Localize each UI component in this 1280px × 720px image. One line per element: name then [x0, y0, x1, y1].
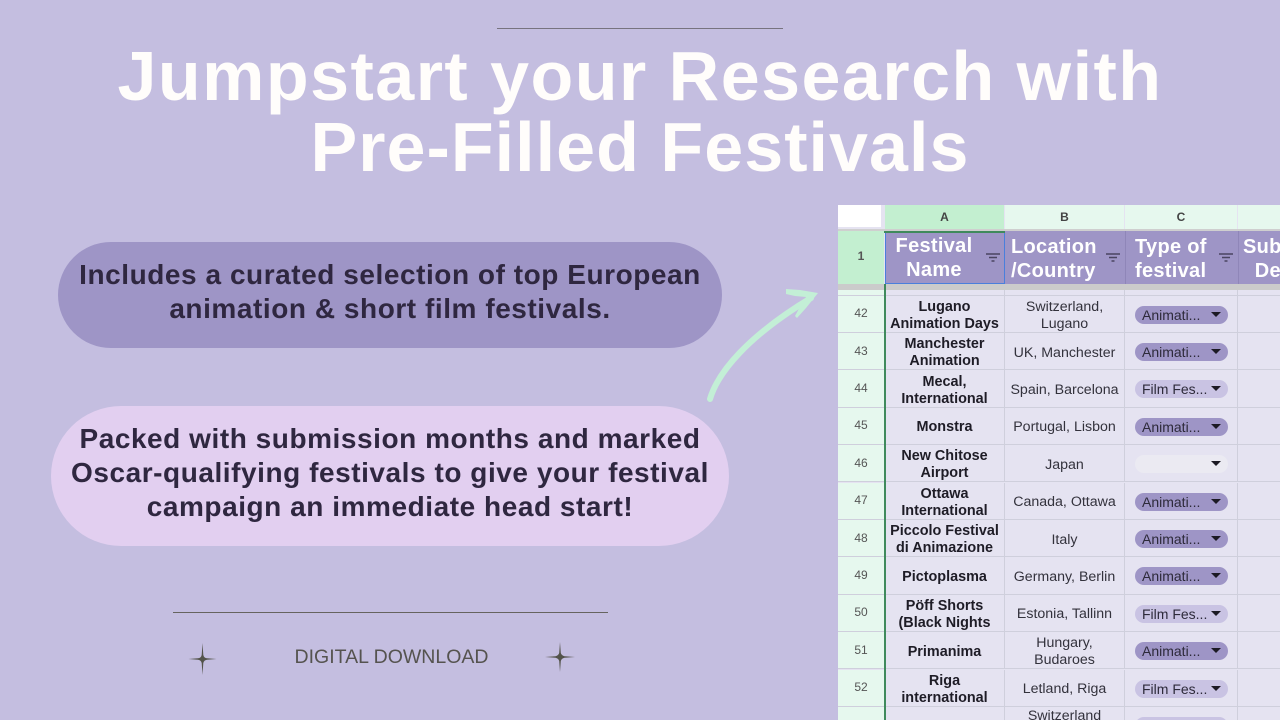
row header 1: [838, 231, 884, 284]
row 43: Manchester: [904, 336, 984, 352]
header cell: type: [1125, 231, 1238, 284]
icon: filter B: [1106, 253, 1120, 262]
row 51: Hungary,: [1036, 635, 1093, 651]
row 51: Animati...: [1142, 643, 1200, 659]
row 49: [838, 557, 1280, 595]
column header B: B: [1060, 210, 1069, 224]
digital download label: DIGITAL DOWNLOAD: [295, 646, 488, 668]
row 47: Animati...: [1142, 494, 1200, 510]
bottom rule: [173, 612, 608, 613]
row 51: Budaroes: [1034, 652, 1095, 668]
icon: left sparkle: [189, 644, 216, 674]
row 46: [838, 445, 1280, 482]
row 51: 51: [854, 643, 868, 657]
row 42: Animation Days: [890, 316, 999, 332]
row 45: Monstra: [917, 419, 972, 435]
row 47: International: [901, 503, 988, 519]
row 48: di Animazione: [896, 540, 993, 556]
row 51: Primanima: [908, 644, 981, 660]
row 47: [838, 482, 1280, 520]
column header D: [1238, 205, 1280, 229]
row 42: Lugano: [1041, 316, 1088, 332]
row 44: Film Fes...: [1142, 381, 1207, 397]
row 43: Animation: [909, 353, 980, 369]
row 52: Riga: [929, 673, 960, 689]
callout: submission months: Oscar-qualifying festivals to give your festival: [71, 457, 709, 488]
gray header gutter: [838, 229, 1280, 231]
header cell: type: festival: [1135, 260, 1206, 282]
title: [117, 37, 1163, 186]
row 52: international: [901, 690, 988, 706]
row 50: 50: [854, 605, 868, 619]
row 46: New Chitose: [901, 448, 988, 464]
row 50: Estonia, Tallinn: [1017, 606, 1112, 622]
row 42: Animati...: [1142, 306, 1200, 322]
callout: curated selection: animation & short film festivals.: [169, 293, 611, 324]
row 50: (Black Nights: [899, 615, 990, 631]
row 47: 47: [854, 493, 868, 507]
column header A: [885, 205, 1004, 229]
row 52: Film Fes...: [1142, 680, 1207, 696]
icon: right sparkle: [546, 642, 574, 672]
row 52: 52: [854, 680, 868, 694]
row 45: Animati...: [1142, 419, 1200, 435]
row 49: Animati...: [1142, 568, 1200, 584]
row 52: Letland, Riga: [1023, 681, 1106, 697]
row 45: 45: [854, 418, 868, 432]
row 48: Animati...: [1142, 531, 1200, 547]
row 50: Pöff Shorts: [906, 598, 983, 614]
row 42: 42: [854, 306, 868, 320]
row 49: Germany, Berlin: [1014, 569, 1115, 585]
header cell: location: Location: [1011, 236, 1097, 258]
icon: filter C: [1219, 253, 1233, 262]
row 44: 44: [854, 381, 868, 395]
row 48: [838, 520, 1280, 557]
row 48: Italy: [1051, 532, 1078, 548]
row 49: Pictoplasma: [902, 569, 987, 585]
row 43: UK, Manchester: [1014, 345, 1115, 361]
row 48: 48: [854, 531, 868, 545]
row 45: Portugal, Lisbon: [1013, 419, 1116, 435]
header cell: location: [1005, 231, 1125, 284]
row 46: 46: [854, 456, 868, 470]
green frozen column border: [884, 284, 886, 720]
row 42: [838, 296, 1280, 333]
row 46: Airport: [920, 465, 968, 481]
top rule: [497, 28, 783, 29]
green header underline: [884, 231, 1005, 233]
row 46: Japan: [1045, 457, 1084, 473]
row 48: Piccolo Festival: [890, 523, 999, 539]
row 50: Film Fes...: [1142, 606, 1207, 622]
row 52: [838, 670, 1280, 707]
frozen pane divider: [838, 284, 1280, 290]
title line 2: Pre-Filled Festivals: [310, 108, 970, 186]
row 44: [838, 370, 1280, 408]
row 53 partial: [838, 707, 1280, 720]
header cell: festival name: Name: [906, 259, 962, 281]
row 42: Lugano: [918, 299, 970, 315]
arrow: pointing to spreadsheet: [707, 289, 818, 402]
row 49: 49: [854, 568, 868, 582]
header cell: submission deadline: [1238, 231, 1280, 284]
row 44: Mecal,: [922, 374, 966, 390]
callout: submission months: campaign an immediate head start!: [147, 491, 633, 522]
row 50: [838, 595, 1280, 632]
row 43: Animati...: [1142, 344, 1200, 360]
row 43: [838, 333, 1280, 370]
row 44: International: [901, 390, 988, 406]
callout: curated selection: [58, 242, 722, 348]
callout: curated selection: Includes a curated selection of top European: [79, 259, 701, 290]
panel: spreadsheet screenshot: [838, 205, 1280, 720]
icon: filter A: [986, 253, 1000, 262]
row 47: Canada, Ottawa: [1013, 494, 1116, 510]
header cell: festival name: [885, 231, 1005, 284]
row 51: [838, 632, 1280, 669]
header cell: location: /Country: [1011, 260, 1096, 282]
callout: submission months: [51, 406, 729, 546]
header cell: type: Type of: [1135, 236, 1207, 258]
title line 1: Jumpstart your Research with: [117, 37, 1163, 115]
callout: submission months: Packed with submission months and marked: [79, 423, 701, 454]
row header 1: 1: [858, 249, 864, 263]
row 43: 43: [854, 344, 868, 358]
column header B: [1005, 205, 1124, 229]
row 47: Ottawa: [920, 486, 968, 502]
row 42: Switzerland,: [1026, 299, 1103, 315]
column header C: C: [1177, 210, 1185, 224]
partial row 41: [838, 290, 1280, 296]
row 45: [838, 408, 1280, 445]
column header C: [1125, 205, 1237, 229]
column header A: A: [940, 210, 949, 224]
header cell: festival name: Festival: [896, 235, 972, 257]
corner cell: [838, 205, 881, 227]
row 44: Spain, Barcelona: [1010, 382, 1119, 398]
